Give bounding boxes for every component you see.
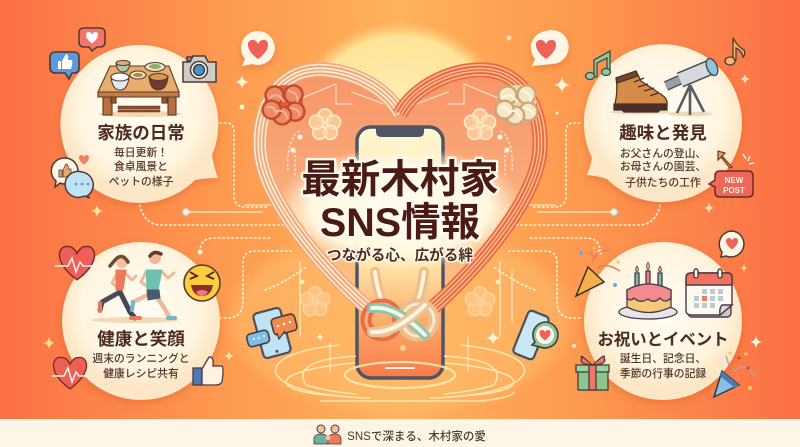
- icon: laughing emoji: [184, 265, 220, 301]
- footer band: [0, 419, 800, 447]
- central glow: [288, 21, 512, 245]
- icon: cream knot: [496, 85, 537, 124]
- icon: thumb bubble: [51, 158, 78, 187]
- icon: left heart bubble: [241, 31, 275, 66]
- icon: right heart bubble: [531, 30, 569, 66]
- icon: red knot: [263, 85, 304, 124]
- vertical light lines: [330, 270, 512, 372]
- mizuhiki knot centre: [366, 272, 434, 336]
- icon: telescope: [666, 57, 720, 116]
- icon: party cone bottom: [714, 352, 755, 397]
- heading: 健康と笑顔: [97, 329, 185, 349]
- icon: heart bubble top: [79, 28, 105, 51]
- icon: gift box: [576, 356, 609, 390]
- icon: NEW POST badge: POST: [723, 186, 745, 195]
- family crest right: [464, 109, 496, 139]
- icon: sparkle by thumb: [224, 351, 234, 361]
- description: 毎日更新！: [114, 145, 168, 159]
- icon: green music note: [586, 51, 610, 80]
- icon: NEW POST badge: [709, 171, 753, 197]
- description: 食卓風景と: [114, 159, 168, 173]
- family crest lower right: [465, 287, 495, 316]
- description: 子供たちの工作: [625, 175, 701, 189]
- panel: 家族の日常: [60, 45, 218, 203]
- family crest left: [310, 109, 340, 139]
- icon: birthday cake: [619, 262, 677, 319]
- icon: dot: [572, 344, 576, 348]
- description: [109, 145, 174, 188]
- icon: sparkle bottom: [704, 203, 714, 213]
- panel: お祝いとイベント: [584, 242, 742, 400]
- icon: heart with pulse top: [55, 246, 96, 280]
- heart cord right: [400, 70, 540, 312]
- description: [620, 351, 706, 380]
- description: 健康レシピ共有: [103, 366, 179, 380]
- description: お父さんの登山、: [620, 146, 706, 160]
- description: 週末のランニングと: [92, 351, 190, 365]
- icon: family: [314, 425, 341, 444]
- description: 誕生日、記念日、: [620, 351, 706, 365]
- icon: runners: [91, 252, 179, 323]
- icon: arrow: [718, 151, 732, 168]
- icon: sparkle white: [750, 336, 762, 348]
- icon: sparkle: [91, 205, 103, 217]
- sparkles centre: [235, 36, 570, 345]
- icon: NEW POST badge: NEW: [725, 176, 744, 185]
- heading: お祝いとイベント: [597, 331, 729, 349]
- icon: like bubble: [50, 52, 79, 79]
- icon: attention rays: [743, 154, 754, 164]
- description: ペットの様子: [109, 174, 174, 188]
- icon: sparkle gold right: [740, 264, 748, 272]
- circuit lines left: [140, 123, 310, 336]
- description: お母さんの園芸、: [620, 159, 706, 173]
- title: [301, 158, 499, 245]
- ripple rings: [276, 345, 524, 401]
- footer text: SNSで深まる、木村家の愛: [347, 429, 486, 443]
- centre text glow: [275, 146, 525, 270]
- icon: party cone top: [576, 246, 620, 296]
- heart cord left: [260, 70, 400, 312]
- icon: orange music note: [725, 38, 745, 65]
- family crest lower left: [300, 287, 330, 316]
- description: [620, 146, 706, 189]
- heart inner details: [288, 84, 512, 250]
- icon: calendar: [686, 269, 732, 317]
- icon: thumbs up: [193, 357, 223, 385]
- icon: small heart: [79, 155, 89, 164]
- icon: chat bubble: [65, 171, 93, 198]
- title: SNS情報: [320, 201, 480, 245]
- icon: dining table with meal: [98, 60, 182, 117]
- description: [92, 351, 190, 380]
- smartphone: [357, 127, 443, 378]
- subtitle: つながる心、広がる絆: [327, 246, 473, 264]
- small phone left: [246, 307, 298, 359]
- circuit lines right: [490, 123, 660, 336]
- panel: 趣味と発見: [584, 44, 742, 202]
- lower glow: [230, 230, 570, 410]
- small phone right: [512, 310, 558, 360]
- description: 季節の行事の記録: [620, 366, 706, 380]
- icon: sparkle near bubble: [43, 337, 55, 349]
- heading: 家族の日常: [97, 123, 185, 143]
- icon: camera: [183, 56, 216, 82]
- icon: hiking boot: [610, 71, 670, 114]
- heading: 趣味と発見: [619, 123, 707, 143]
- title: 最新木村家: [301, 158, 499, 202]
- panel: 健康と笑顔: [62, 242, 220, 400]
- icon: sparkle right top: [740, 74, 750, 84]
- heart panel fill: [260, 70, 540, 312]
- icon: chat heart bubble: [719, 231, 744, 257]
- icon: heart with pulse bottom: [52, 357, 90, 389]
